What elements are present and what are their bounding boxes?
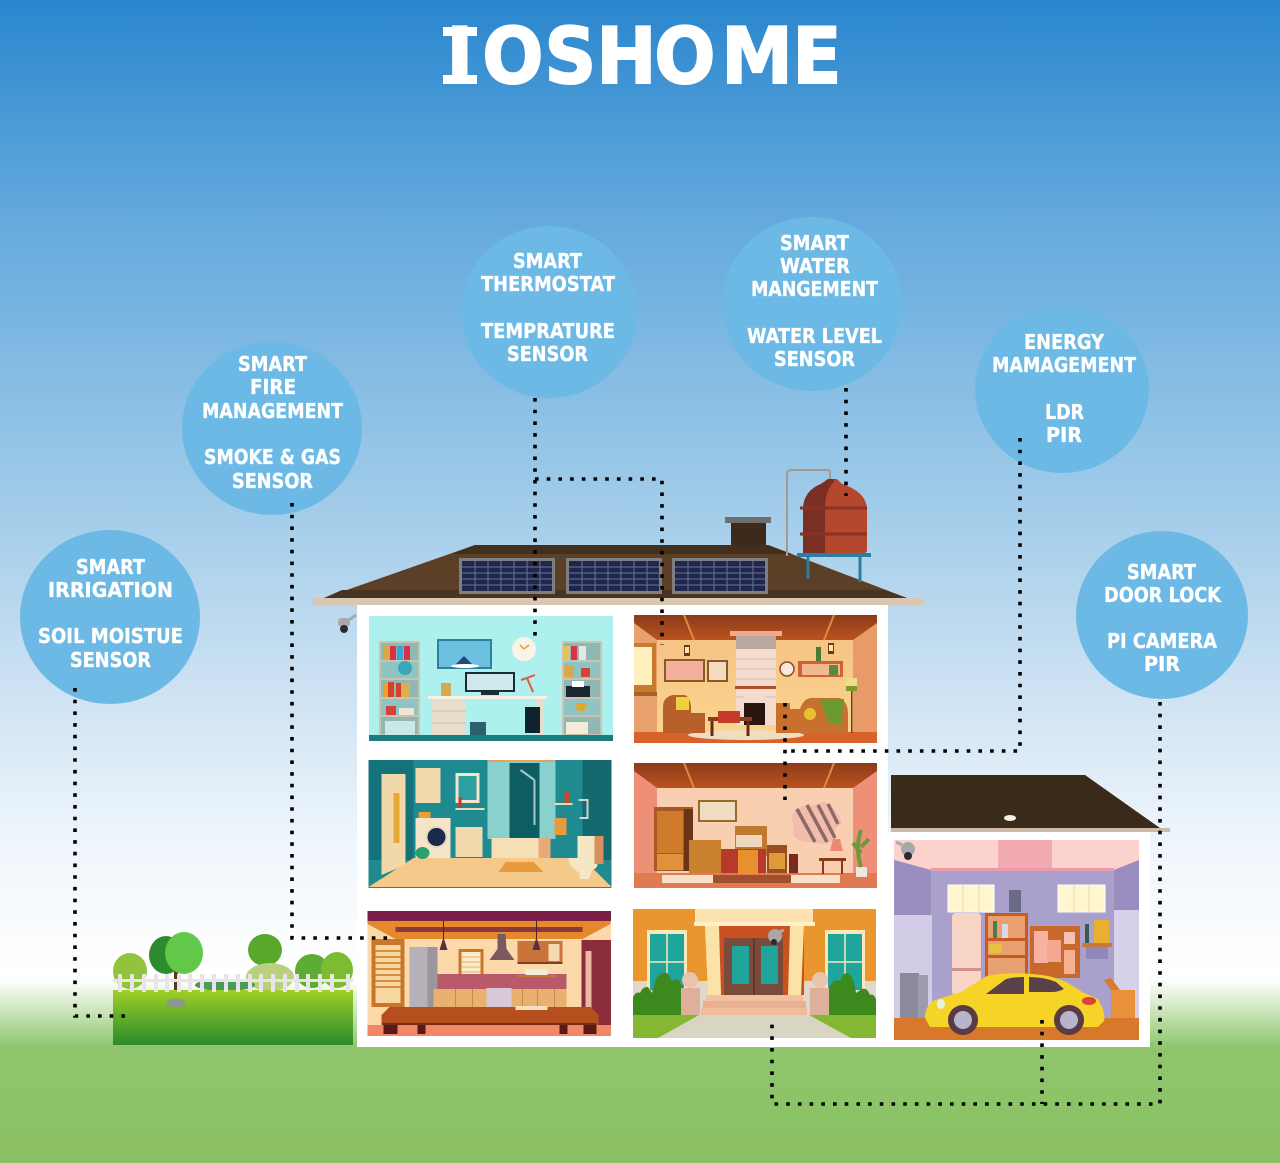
right door <box>582 940 611 1027</box>
dotted connector: water <box>844 388 848 496</box>
door <box>382 774 406 875</box>
bed <box>689 826 767 874</box>
bubble: smart fire management: SMART <box>238 352 307 376</box>
backsplash and counter <box>434 974 566 1007</box>
dotted connector: door lock <box>772 702 1160 1104</box>
room: bathroom <box>368 760 612 888</box>
side walls <box>894 860 1139 1020</box>
bubble: smart thermostat: TEMPRATURE <box>481 319 615 343</box>
shower cabin <box>488 760 556 858</box>
picket fence <box>113 974 353 992</box>
bubble: smart irrigation: SENSOR <box>70 648 151 672</box>
bubble: smart thermostat: SENSOR <box>507 342 588 366</box>
bubble: smart water management: SENSOR <box>774 347 855 371</box>
pendant lamps <box>684 643 834 656</box>
floor <box>894 1018 1139 1040</box>
picture <box>698 800 737 822</box>
house white body <box>357 603 1150 1047</box>
room: kitchen <box>368 911 611 1036</box>
dotted connector: thermostat <box>535 398 662 645</box>
lawn and path <box>633 1015 876 1038</box>
bubble: smart door lock: PI CAMERA <box>1107 629 1217 653</box>
bubble: smart fire management: SENSOR <box>232 469 313 493</box>
room: house entrance <box>633 909 876 1038</box>
nightstand and boots <box>767 845 798 873</box>
bubble: smart irrigation: SMART <box>76 555 145 579</box>
bubble: smart door lock: PIR <box>1144 652 1180 676</box>
solar panels <box>459 558 768 594</box>
bubble: energy management: LDR <box>1045 400 1084 424</box>
shrubs <box>633 973 876 1015</box>
stairs <box>701 995 807 1015</box>
bubble: smart thermostat <box>461 226 637 398</box>
high windows <box>948 885 1105 912</box>
center window <box>458 949 484 984</box>
room: office <box>369 616 613 741</box>
range hood <box>490 934 514 960</box>
bubble: smart fire management: FIRE <box>250 375 296 399</box>
dining table <box>382 1006 598 1034</box>
bubble: smart irrigation: IRRIGATION <box>48 578 173 602</box>
windows <box>647 930 865 990</box>
room: garage <box>894 840 1139 1040</box>
lower stone wall <box>633 981 876 1015</box>
room: living room <box>634 615 877 743</box>
portico and columns <box>694 909 815 995</box>
sofa and side table <box>776 698 848 733</box>
bubble: energy management: ENERGY <box>1024 330 1104 354</box>
clock <box>512 637 536 661</box>
stone pillars <box>681 972 829 1016</box>
bubble: smart fire management <box>182 341 362 515</box>
wall picture <box>437 639 492 669</box>
upper cabinets <box>518 941 562 977</box>
wood ceiling <box>634 615 877 640</box>
bubble: energy management: MAMAGEMENT <box>992 353 1136 377</box>
mirror and basin shelf <box>456 773 484 810</box>
sink cabinet <box>456 827 482 857</box>
wall shelf <box>798 647 843 677</box>
dark side walls <box>368 760 612 860</box>
dotted connector: irrigation <box>75 688 125 1016</box>
bubble: smart thermostat: THERMOSTAT <box>481 272 615 296</box>
bubble: smart water management: SMART <box>780 231 849 255</box>
right shelf <box>562 641 602 735</box>
bubble: energy management <box>975 305 1149 473</box>
bubble: smart irrigation: SOIL MOISTUE <box>38 624 183 648</box>
bubble: smart door lock: DOOR LOCK <box>1104 583 1222 607</box>
bubble: smart water management <box>722 217 902 391</box>
wood ceiling <box>634 763 877 788</box>
floor <box>368 858 612 887</box>
room: bedroom <box>634 763 877 888</box>
bubble: smart water management: MANGEMENT <box>751 277 878 301</box>
fridge <box>952 913 981 996</box>
metal barrels <box>900 973 928 1018</box>
rock <box>166 999 186 1007</box>
wall cabinet <box>416 768 440 803</box>
armchair <box>663 695 705 733</box>
fridge <box>410 947 438 1007</box>
pictures <box>664 659 728 682</box>
desk <box>428 672 547 735</box>
wardrobe <box>654 807 693 871</box>
tool shelf <box>985 913 1028 978</box>
window <box>634 643 657 696</box>
lawn <box>113 990 353 1045</box>
left shelf <box>379 641 420 735</box>
bath mat <box>498 862 544 872</box>
cardboard box <box>1104 978 1135 1022</box>
porch recess <box>717 922 804 995</box>
yellow car <box>925 973 1104 1035</box>
bubble: smart irrigation <box>20 530 200 704</box>
main roof with chimney <box>313 517 923 605</box>
trees behind fence <box>113 932 353 991</box>
floor <box>368 1025 611 1036</box>
bubble: smart fire management: SMOKE & GAS <box>204 445 341 469</box>
title: IOSHOME <box>447 10 841 102</box>
floor lamp <box>846 678 857 733</box>
zebra skin <box>792 802 842 844</box>
dotted connector: fire <box>292 503 390 938</box>
left window <box>372 939 404 1007</box>
bubble: smart water management: WATER <box>780 254 850 278</box>
dotted connector: energy <box>785 438 1020 800</box>
washing machine <box>416 812 450 859</box>
ceiling beams <box>368 911 611 939</box>
bubble: smart water management: WATER LEVEL <box>747 324 882 348</box>
side table lamp and plant <box>819 830 869 877</box>
side walls <box>634 771 877 883</box>
coffee table <box>708 711 752 736</box>
fireplace <box>730 631 782 725</box>
side walls <box>634 623 877 743</box>
bubble: smart thermostat: SMART <box>513 249 582 273</box>
wall clock <box>780 662 794 676</box>
bubble: energy management: PIR <box>1046 423 1082 447</box>
floor strip <box>369 735 613 741</box>
garden <box>113 932 353 1045</box>
pendant lamps <box>440 921 540 950</box>
floor and rug <box>634 730 877 743</box>
bottle <box>1009 890 1021 912</box>
wall shelf with items <box>1082 920 1112 959</box>
bubble: smart door lock <box>1076 531 1248 699</box>
security cameras <box>338 615 915 945</box>
toilet <box>568 836 604 879</box>
ceiling <box>894 840 1139 871</box>
floor and rug <box>634 873 877 888</box>
garage roof <box>891 775 1170 832</box>
water tank on stand <box>787 470 871 582</box>
bubble: smart door lock: SMART <box>1127 560 1196 584</box>
pegboard <box>1030 926 1080 978</box>
bubble: smart fire management: MANAGEMENT <box>202 399 343 423</box>
double door <box>724 938 783 995</box>
right wall shelves and towel <box>554 791 588 835</box>
